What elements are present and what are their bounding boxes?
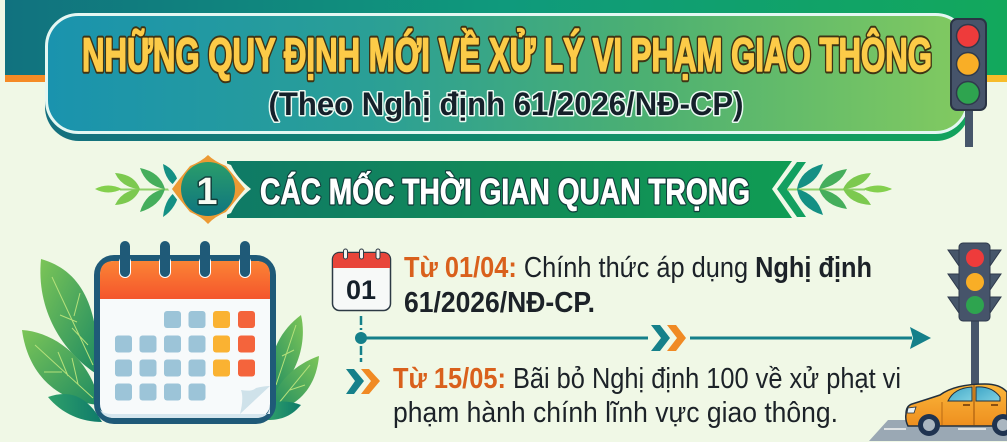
text: milestone 01/04 — [404, 252, 872, 319]
subtitle: (Theo Nghị định 61/2026/NĐ-CP) — [268, 86, 744, 122]
section number badge: 1 — [196, 171, 218, 213]
icon: header traffic light — [951, 19, 986, 147]
ribbon tail stripes — [777, 162, 806, 217]
calendar body — [97, 258, 273, 421]
header band — [5, 0, 1007, 82]
left leaves — [22, 259, 102, 422]
icon: traffic light with car on road — [869, 243, 1007, 441]
text: milestone 01/04: 61/2026/NĐ-CP. — [404, 287, 595, 319]
street traffic light — [948, 243, 1001, 386]
text: milestone 01/04: Từ 01/04: Chính thức áp dụng Nghị định — [404, 252, 872, 284]
ribbon body — [227, 161, 792, 218]
calendar header — [100, 261, 270, 299]
calendar day cells — [115, 311, 255, 400]
timeline arrow — [355, 316, 931, 362]
icon: small calendar 01: 01 — [346, 275, 376, 305]
text: milestone 15/05 — [393, 363, 901, 429]
text: milestone 15/05: Từ 15/05: Bãi bỏ Nghị định 100 về xử phạt vi — [393, 363, 901, 395]
icon: double chevron — [346, 369, 380, 394]
section heading text: CÁC MỐC THỜI GIAN QUAN TRỌNG — [260, 170, 750, 212]
section number badge — [168, 150, 251, 229]
text: milestone 15/05: phạm hành chính lĩnh vực giao thông. — [393, 397, 838, 429]
right leaves — [268, 315, 319, 420]
right leaf decoration — [787, 164, 892, 215]
car — [906, 384, 1007, 436]
header panel — [45, 14, 970, 141]
section heading text: CÁC MỐC THỜI GIAN QUAN TRỌNG — [260, 170, 750, 212]
icon: small calendar 01 — [332, 249, 390, 310]
calendar page curl — [240, 386, 270, 414]
calendar rings — [125, 246, 245, 272]
left leaf decoration — [95, 164, 180, 217]
icon: big calendar with leaves — [22, 246, 319, 422]
road — [869, 420, 1007, 441]
section heading ribbon — [95, 150, 892, 229]
